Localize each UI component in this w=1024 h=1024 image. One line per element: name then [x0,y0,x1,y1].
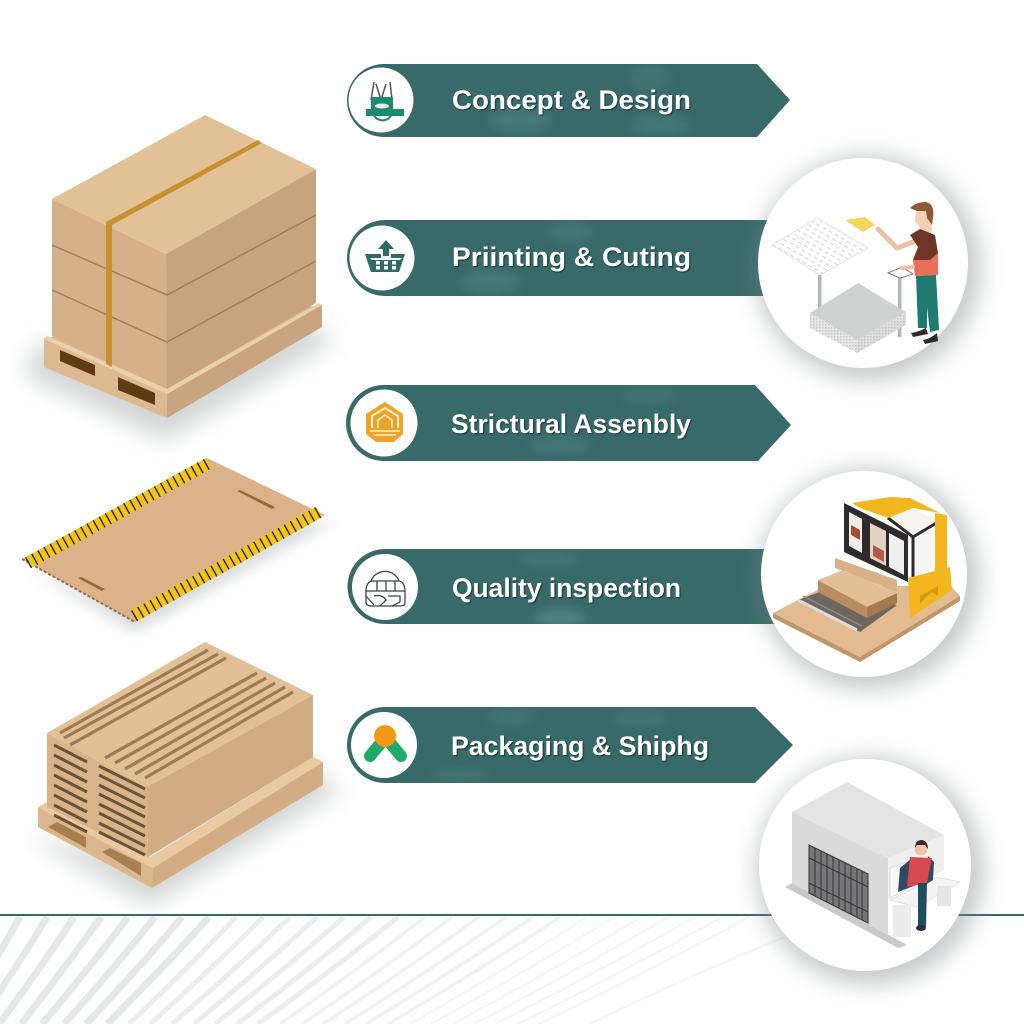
illustration: corrugated stack on pallet [25,642,340,905]
top grooves [60,650,293,778]
icon badge [351,712,417,778]
sheet lower edge [22,559,135,622]
banner 3: structural assembly [346,385,791,461]
icon: orange hexagon emblem [366,402,403,442]
banner 5: packaging and shipping [347,707,793,783]
machine frame [844,503,938,582]
yellow frame [852,497,952,618]
pallet [38,757,323,888]
stack top face [47,642,313,787]
warehouse building [785,782,944,948]
icon badge [350,226,414,290]
illustration: flat corrugated sheet [22,458,332,632]
slot bottom [78,577,105,591]
stack left face [47,733,148,857]
icon: rosette [370,725,401,756]
conveyor [798,590,897,632]
carton seams [52,215,316,342]
icon badge [348,68,414,132]
icon: basket [365,240,405,272]
wooden base [773,585,960,662]
label: Strictural Assenbly [451,409,691,439]
carton right face [166,169,316,389]
banner 1: concept and design [347,64,790,137]
circle: warehouse and courier scene [757,758,983,984]
slot top [237,490,275,509]
icon: outline inspection [366,571,405,606]
yellow note [845,217,875,232]
label: Quality inspection [452,573,681,603]
yellow edge strip bottom [134,512,319,616]
white bench [890,862,960,937]
circle: assembly machine scene [759,469,979,689]
label: Concept & Design [452,85,691,115]
worker [878,202,939,344]
wooden platforms [818,558,897,618]
footer divider line [0,914,1024,916]
stack right face [147,695,313,857]
yellow edge strip top [28,463,209,563]
label: Packaging & Shiphg [451,731,709,761]
icon badge [352,554,418,620]
banner 2: printing and cutting [347,220,790,296]
pallet [44,303,322,418]
printed sheet [772,218,868,275]
warehouse gate [809,845,868,923]
courier person [898,840,934,931]
banner 4: quality inspection [348,549,790,628]
sheet surface [22,458,325,622]
circle: printing operator scene [756,156,980,380]
illustration: stacked cartons on pallet [25,115,335,440]
packing strap [106,140,262,367]
footer stripe pattern [0,917,790,1024]
left face grooves [54,745,145,855]
side stand [888,267,913,278]
icon badge [350,390,418,456]
press table [810,275,906,353]
icon: harness figure [367,82,403,120]
label: Priinting & Cuting [452,242,691,272]
carton top face [52,115,316,254]
carton left face [52,199,167,389]
